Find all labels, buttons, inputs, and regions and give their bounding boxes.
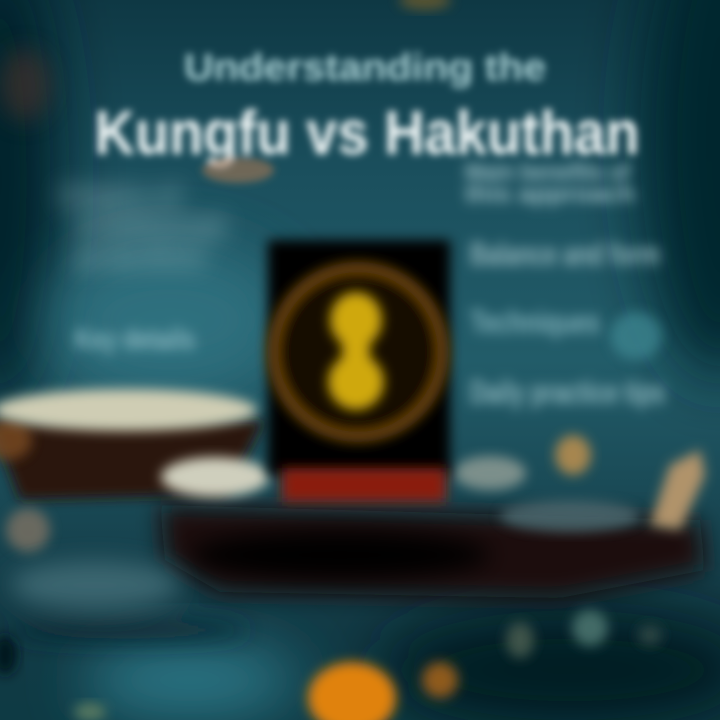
text block: left upper bbox=[60, 180, 225, 271]
title: subtitle line: Understanding the bbox=[184, 47, 546, 89]
text block: right top: this approach bbox=[465, 181, 635, 208]
decoration: left small object bbox=[6, 508, 50, 552]
text block: right top bbox=[465, 159, 635, 208]
text block: right third: Techniques bbox=[470, 304, 600, 340]
bowl: center large bbox=[160, 456, 705, 598]
decoration: lower left dish bbox=[10, 561, 250, 640]
title: main heading: Kungfu vs Hakuthan bbox=[94, 99, 640, 168]
bowl: left bbox=[0, 389, 265, 500]
text block: left upper: practice bbox=[75, 241, 205, 271]
decoration: bottom orange glow bbox=[74, 662, 458, 720]
text block: left upper: traditional bbox=[75, 210, 225, 241]
text block: right top: Main benefits of bbox=[465, 159, 631, 186]
text block: left lower: Key details bbox=[75, 323, 195, 356]
emblem ring bbox=[273, 267, 443, 437]
central emblem panel bbox=[268, 240, 450, 502]
decoration: lower right pebbles bbox=[506, 610, 662, 658]
text block: left upper: Origins of bbox=[60, 180, 181, 211]
decoration: spoon right bbox=[650, 450, 705, 530]
red band bbox=[282, 468, 446, 502]
decoration: small spice right bbox=[555, 435, 591, 475]
icon: right circle bbox=[610, 312, 662, 360]
emblem symbol bbox=[328, 292, 384, 410]
